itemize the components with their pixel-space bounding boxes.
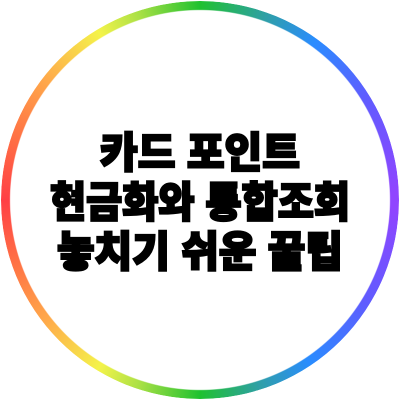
- title line 2: 현금화와 통합조회: [50, 179, 350, 226]
- title line 1: 카드 포인트: [100, 130, 300, 176]
- title line 3: 놓치기 쉬운 꿀팁: [57, 228, 343, 276]
